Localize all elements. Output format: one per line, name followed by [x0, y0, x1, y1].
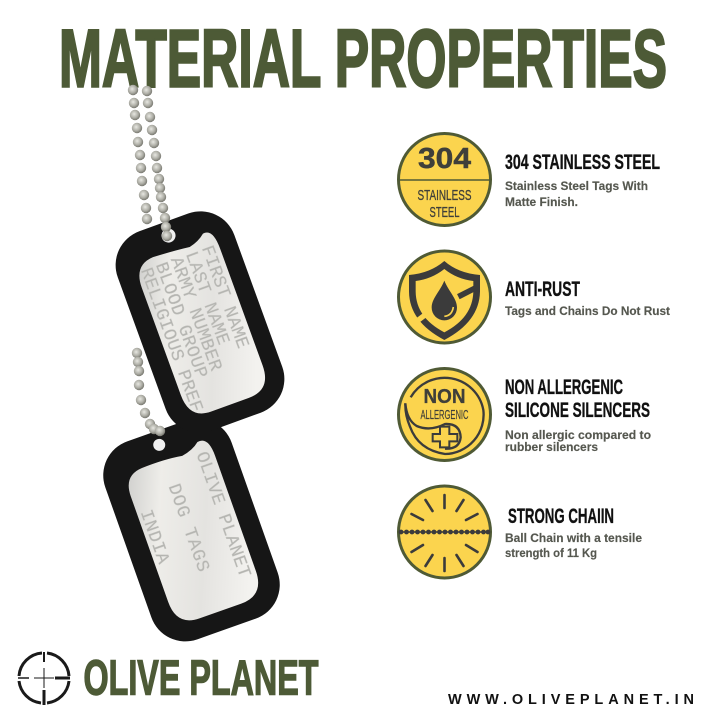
tag: upper: LAST NAME [180, 249, 232, 348]
text block: anti-rust: ANTI-RUST [505, 278, 580, 301]
text block: non allergenic: rubber silencers [505, 440, 598, 454]
icon: 304 stainless steel [398, 134, 490, 226]
icon: 304 stainless steel: STEEL [430, 204, 460, 221]
text block: 304 stainless steel [505, 151, 660, 209]
icon: non allergenic [398, 368, 490, 460]
text block: strong chain: Ball Chain with a tensile [505, 531, 642, 545]
icon: strong chain [398, 486, 490, 578]
tag: upper: BLOOD GROUP [150, 260, 211, 381]
tag: lower: DOG TAGS [163, 481, 212, 575]
chain: right strand [142, 86, 172, 241]
text block: 304 stainless steel: Matte Finish. [505, 195, 578, 209]
photo: dog tags on ball chains [93, 85, 295, 651]
text block: non allergenic: NON ALLERGENIC [505, 376, 623, 399]
chain between tags [132, 348, 155, 429]
text block: strong chain: STRONG CHAIIN [508, 505, 614, 528]
logo: wordmark: OLIVE PLANET [84, 652, 319, 706]
chain into lower tag [149, 424, 165, 436]
text block: 304 stainless steel: Stainless Steel Tags With [505, 179, 648, 193]
website url: WWW.OLIVEPLANET.IN [448, 692, 694, 708]
icon: non allergenic: NON [424, 386, 466, 408]
logo: reticle icon [18, 652, 70, 705]
text block: strong chain: strength of 11 Kg [505, 546, 597, 560]
tag: upper [105, 201, 295, 443]
tag: upper: FIRST NAME [196, 243, 252, 351]
icon: 304 stainless steel: 304 [418, 143, 471, 175]
tag: upper: RELIGIOUS PREF [135, 265, 206, 415]
icon: non allergenic: ALLERGENIC [420, 407, 468, 422]
text block: anti-rust: Tags and Chains Do Not Rust [505, 304, 670, 318]
icon: anti-rust shield [398, 251, 490, 343]
tag: lower [93, 409, 290, 651]
tag: lower: INDIA [135, 507, 173, 567]
icon: 304 stainless steel: STAINLESS [418, 187, 472, 204]
tag: upper: ARMY NUMBER [165, 254, 225, 374]
text block: strong chain [505, 505, 642, 560]
tag: lower: OLIVE PLANET [191, 449, 254, 581]
text block: non allergenic: Non allergic compared to [505, 428, 651, 442]
text block: anti-rust [505, 278, 670, 318]
chain: left strand [128, 85, 152, 224]
text block: non allergenic [505, 376, 651, 454]
